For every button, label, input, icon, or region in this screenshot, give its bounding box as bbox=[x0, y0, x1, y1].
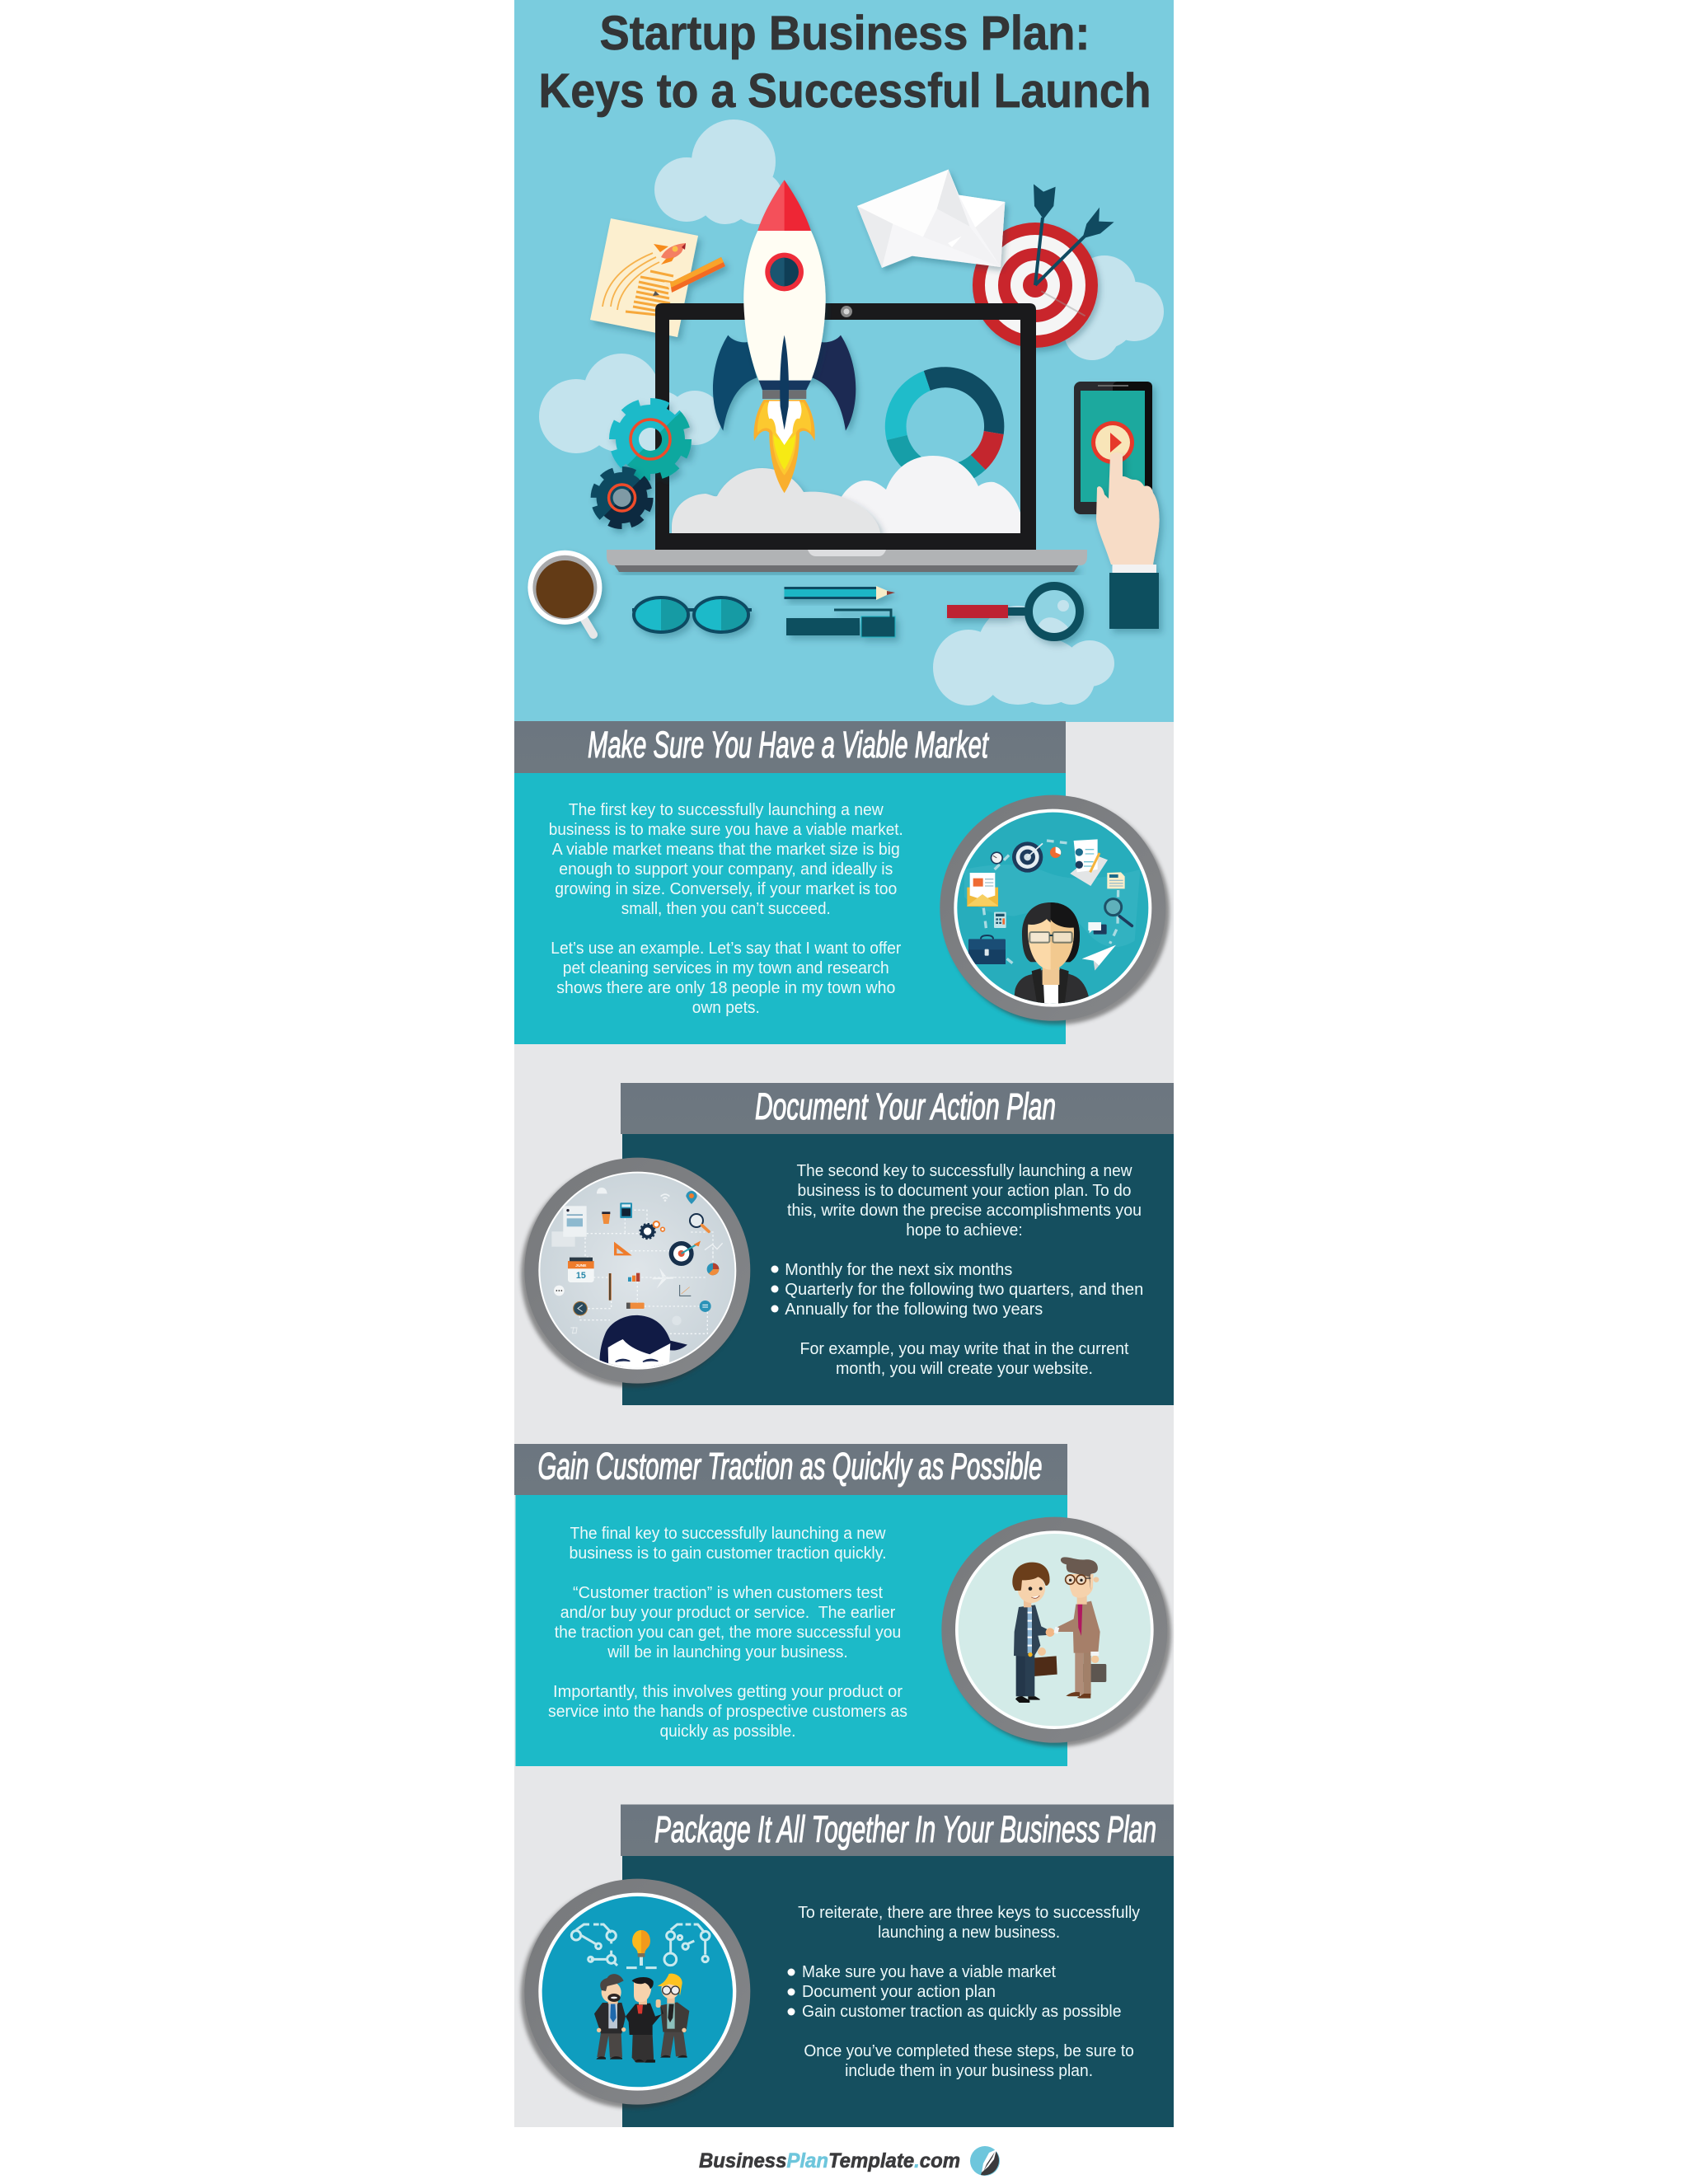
body: viable market: Let’s use an example. Let’s say that I want to offer bbox=[551, 939, 901, 958]
body: action plan: The second key to successfully launching a new bbox=[796, 1161, 1132, 1180]
heading: viable market bbox=[514, 721, 1066, 773]
body: customer traction: business is to gain customer traction quickly. bbox=[569, 1544, 887, 1563]
cloud bottom right bbox=[933, 606, 1114, 705]
circle illustration: planning icons bbox=[521, 1158, 750, 1387]
circle illustration: team and idea bbox=[521, 1879, 750, 2108]
body: customer traction: the traction you can get, the more successful you bbox=[555, 1623, 901, 1642]
body: business plan: Once you’ve completed these steps, be sure to bbox=[804, 2041, 1134, 2060]
cloud top bbox=[654, 120, 783, 224]
body: customer traction: The final key to successfully launching a new bbox=[570, 1524, 886, 1543]
body: business plan: To reiterate, there are three keys to successfully bbox=[798, 1903, 1141, 1922]
right man bbox=[658, 1974, 689, 2058]
body: business plan: launching a new business. bbox=[878, 1923, 1060, 1942]
body: viable market: pet cleaning services in my town and research bbox=[563, 958, 889, 977]
icon: envelopes bbox=[857, 170, 1005, 268]
footer logo bbox=[699, 2146, 1000, 2176]
body: viable market: The first key to successfully launching a new bbox=[569, 800, 884, 819]
circle illustration: businesswoman bbox=[940, 795, 1170, 1024]
heading: business plan bbox=[621, 1805, 1174, 1856]
body: customer traction bbox=[516, 1495, 1067, 1766]
body: viable market bbox=[514, 773, 1066, 1044]
body: viable market: growing in size. Conversely, if your market is too bbox=[555, 879, 897, 898]
icon: coffee cup bbox=[528, 551, 602, 635]
middle man bbox=[626, 1977, 663, 2063]
icon: glasses bbox=[632, 598, 752, 632]
body: business plan: include them in your business plan. bbox=[845, 2061, 1093, 2080]
title bbox=[539, 7, 1151, 118]
icon: hand bbox=[1096, 452, 1160, 629]
icon: pen nib bbox=[970, 2146, 1000, 2176]
icon: small gear bbox=[594, 470, 650, 526]
icon: large gear bbox=[613, 402, 687, 476]
body: customer traction: Importantly, this involves getting your product or bbox=[553, 1682, 903, 1701]
infographic bbox=[514, 0, 1174, 2176]
body: viable market: own pets. bbox=[692, 998, 760, 1017]
panel: viable market bbox=[514, 721, 1170, 1044]
body: action plan bbox=[622, 1134, 1174, 1405]
icon: marker bbox=[786, 610, 895, 637]
cloud right of target bbox=[1064, 255, 1164, 360]
idea network icons bbox=[571, 1924, 710, 1966]
heading: action plan bbox=[621, 1083, 1174, 1134]
title: Startup Business Plan: bbox=[600, 7, 1090, 60]
bullet list: business plan bbox=[788, 1962, 1121, 2021]
body: action plan: business is to document your action plan. To do bbox=[798, 1181, 1131, 1200]
icon: phone bbox=[1074, 382, 1152, 514]
body: business plan bbox=[622, 1856, 1174, 2127]
panel: hero illustration bbox=[514, 0, 1174, 723]
body: viable market: business is to make sure you have a viable market. bbox=[549, 820, 903, 839]
title: Keys to a Successful Launch bbox=[539, 64, 1151, 118]
circle illustration: planning icons: JUNE bbox=[575, 1263, 587, 1268]
bullet list: action plan: Annually for the following two years bbox=[785, 1300, 1043, 1319]
icon: magnifier bbox=[947, 586, 1080, 637]
bullet list: business plan: Document your action plan bbox=[802, 1982, 996, 2001]
left man bbox=[594, 1974, 626, 2060]
laptop base bbox=[607, 550, 1087, 572]
icon: sticky note with rocket bbox=[590, 218, 725, 337]
chart: donut bbox=[885, 367, 1004, 482]
icon: pencil bbox=[785, 586, 895, 600]
cloud left bbox=[539, 354, 722, 453]
icon: rocket bbox=[713, 180, 856, 493]
left businessman bbox=[1012, 1563, 1057, 1703]
heading: viable market: Make Sure You Have a Viable Market bbox=[588, 724, 990, 766]
footer wordmark: BusinessPlanTemplate.com bbox=[699, 2149, 960, 2172]
panel: business plan bbox=[521, 1805, 1174, 2127]
body: customer traction: will be in launching your business. bbox=[607, 1643, 848, 1661]
right businessman bbox=[1046, 1557, 1106, 1699]
bullet list: business plan: Make sure you have a viable market bbox=[802, 1962, 1056, 1981]
body: viable market: A viable market means that the market size is big bbox=[552, 840, 900, 859]
body: customer traction: quickly as possible. bbox=[659, 1722, 796, 1741]
body: customer traction: “Customer traction” is when customers test bbox=[573, 1583, 883, 1602]
laptop frame bbox=[655, 303, 1036, 550]
screen clouds bbox=[672, 456, 1024, 533]
body: action plan: month, you will create your website. bbox=[836, 1359, 1093, 1378]
bullet list: action plan bbox=[771, 1260, 1143, 1319]
body: action plan: hope to achieve: bbox=[906, 1221, 1023, 1240]
icon: target with arrows bbox=[973, 184, 1114, 348]
body: viable market: shows there are only 18 people in my town who bbox=[556, 978, 895, 997]
body: customer traction: and/or buy your product or service. The earlier bbox=[560, 1603, 895, 1622]
bullet list: business plan: Gain customer traction as quickly as possible bbox=[802, 2002, 1121, 2021]
bullet list: action plan: Quarterly for the following two quarters, and then bbox=[785, 1280, 1143, 1299]
content background bbox=[514, 722, 1174, 2127]
body: action plan: this, write down the precise accomplishments you bbox=[787, 1201, 1142, 1220]
panel: action plan bbox=[521, 1083, 1174, 1405]
heading: customer traction: Gain Customer Traction as Quickly as Possible bbox=[537, 1446, 1042, 1487]
circle illustration: handshake bbox=[941, 1517, 1171, 1746]
body: customer traction: service into the hands of prospective customers as bbox=[548, 1702, 907, 1721]
body: viable market: enough to support your company, and ideally is bbox=[559, 860, 893, 879]
heading: action plan: Document Your Action Plan bbox=[755, 1085, 1056, 1127]
body: action plan: For example, you may write that in the current bbox=[799, 1339, 1129, 1358]
heading: customer traction bbox=[514, 1444, 1067, 1495]
heading: business plan: Package It All Together In Your Business Plan bbox=[654, 1808, 1156, 1850]
panel: customer traction bbox=[514, 1444, 1171, 1766]
body: viable market: small, then you can’t succeed. bbox=[621, 899, 831, 918]
bullet list: action plan: Monthly for the next six months bbox=[785, 1260, 1012, 1279]
circle illustration: planning icons: 15 bbox=[576, 1271, 586, 1281]
